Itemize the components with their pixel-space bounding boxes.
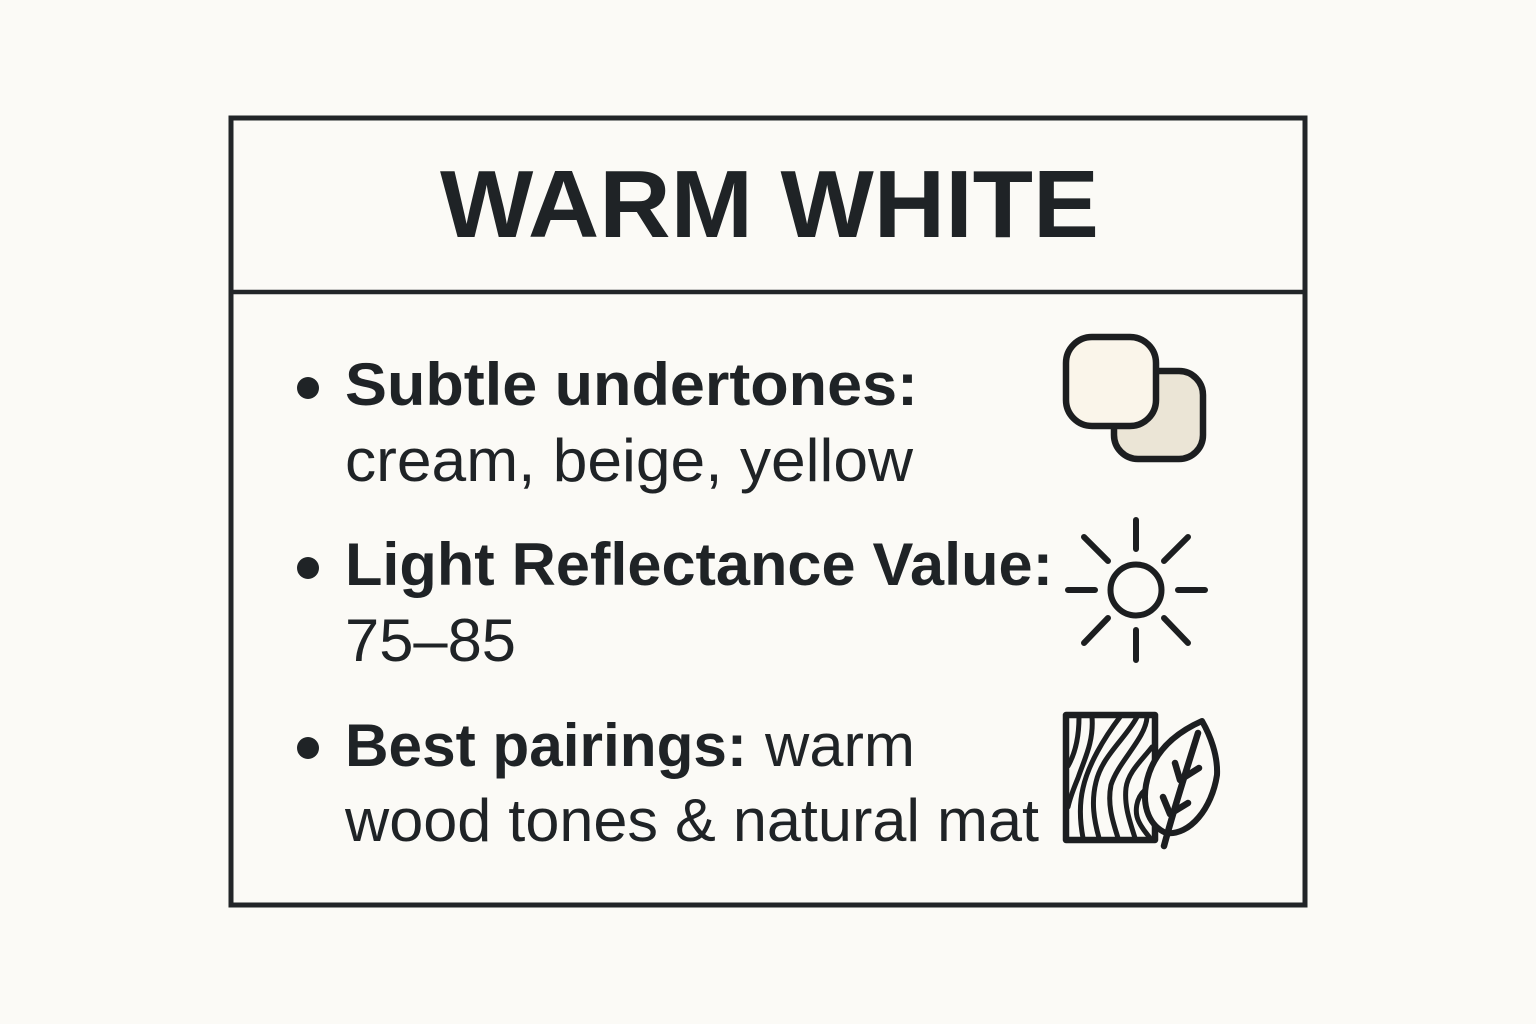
icon: sun (1068, 520, 1205, 660)
icon: overlapping swatches (1066, 337, 1203, 459)
bullet: light reflectance value: Light Reflectance Value: (345, 531, 1053, 598)
title: WARM WHITE (440, 151, 1099, 258)
bullet: best pairings: wood tones & natural mat (344, 787, 1039, 854)
bullet: light reflectance value: 75–85 (345, 607, 516, 674)
bullet: best pairings: warm (764, 712, 915, 779)
bullet: subtle undertones (297, 351, 918, 494)
leaf (1145, 721, 1217, 833)
bullet: best pairings (297, 712, 1039, 854)
icon: wood grain and leaf (1066, 715, 1217, 846)
bullet: light reflectance value (297, 531, 1053, 674)
panel: warm white card (231, 118, 1305, 905)
bullet: best pairings: Best pairings: (345, 712, 747, 779)
bullet: subtle undertones: Subtle undertones: (345, 351, 918, 418)
bullet: subtle undertones: cream, beige, yellow (345, 427, 914, 494)
